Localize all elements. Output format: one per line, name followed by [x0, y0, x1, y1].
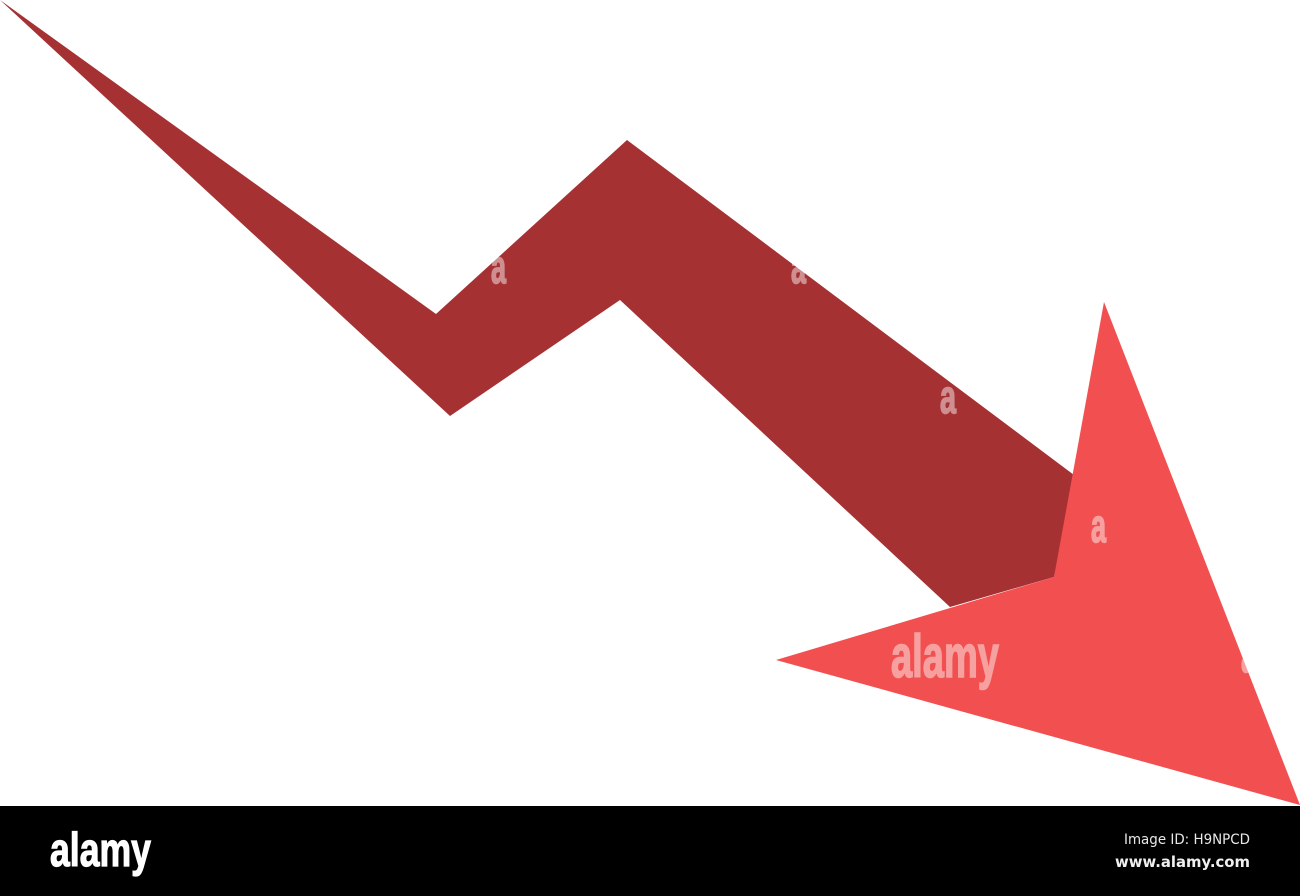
image id: Image ID: H9NPCD	[1124, 832, 1250, 848]
watermark: letter a: a	[791, 240, 806, 293]
watermark: alamy: alamy	[891, 623, 999, 690]
watermark text	[491, 240, 1256, 690]
arrow shaft	[0, 0, 1078, 607]
arrow head	[776, 302, 1300, 805]
website url: www.alamy.com	[1115, 853, 1250, 871]
watermark: letter a: a	[491, 240, 506, 293]
watermark: letter a: a	[940, 370, 957, 423]
footer logo: alamy: alamy	[50, 823, 151, 876]
watermark: letter a: a	[1091, 499, 1106, 552]
watermark: letter a: a	[1241, 629, 1256, 682]
footer bar	[0, 806, 1300, 896]
